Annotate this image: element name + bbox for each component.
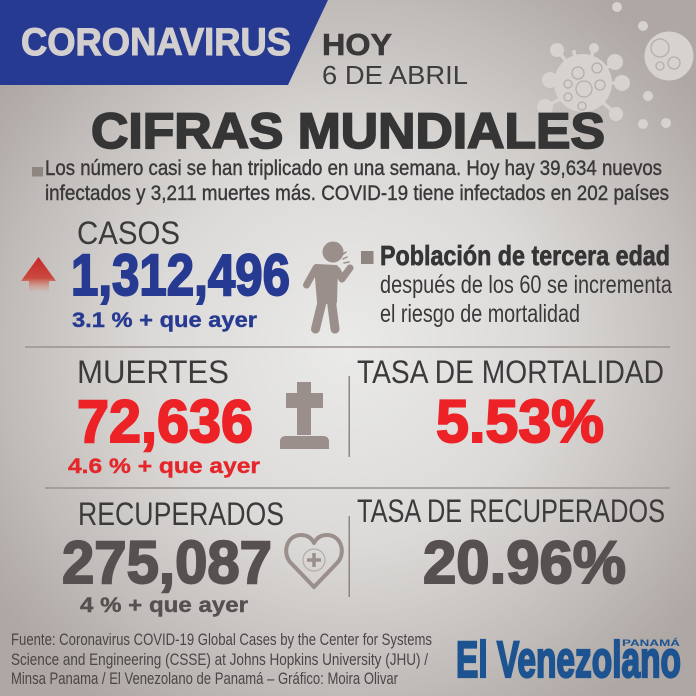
panel: tasa de mortalidad: TASA DE MORTALIDAD (357, 354, 664, 390)
panel: recuperados: 275,087 (62, 529, 272, 596)
header banner (0, 0, 328, 85)
header banner: CORONAVIRUS (21, 21, 291, 64)
title: CIFRAS MUNDIALES (91, 103, 605, 159)
panel: tasa de mortalidad (357, 354, 664, 455)
panel: casos: 1,312,496 (71, 243, 290, 308)
source text: Science and Engineering (CSSE) at Johns Hopkins University (JHU) / (11, 650, 428, 669)
panel: casos (71, 215, 290, 332)
intro text (32, 157, 669, 205)
panel: tasa de recuperados (357, 493, 665, 596)
panel: recuperados: RECUPERADOS (78, 496, 284, 532)
logo: El Venezolano: PANAMÁ (622, 638, 680, 649)
panel: poblacion de tercera edad: el riesgo de mortalidad (380, 300, 580, 328)
date heading: 6 DE ABRIL (322, 60, 468, 90)
panel: muertes: MUERTES (77, 354, 229, 390)
panel: muertes (68, 354, 260, 478)
date heading: HOY (322, 27, 392, 62)
source text: Minsa Panama / El Venezolano de Panamá – Gráfico: Moira Olivar (11, 669, 398, 688)
icon: grave cross (280, 382, 329, 449)
source text (11, 630, 432, 688)
panel: muertes: 4.6 % + que ayer (68, 455, 260, 478)
date heading (322, 27, 468, 90)
panel: tasa de recuperados: 20.96% (423, 529, 626, 596)
icon: coronavirus decoration (537, 2, 694, 129)
panel: casos: CASOS (77, 215, 180, 251)
icon: coughing person (306, 242, 350, 329)
panel: poblacion de tercera edad (361, 240, 672, 328)
source text: Fuente: Coronavirus COVID-19 Global Cases by the Center for Systems (11, 630, 432, 649)
icon: heart with plus (286, 535, 342, 587)
icon: up arrow (21, 257, 56, 291)
panel: muertes: 72,636 (77, 388, 253, 455)
panel: recuperados (62, 496, 284, 617)
panel: casos: 3.1 % + que ayer (72, 309, 257, 332)
panel: tasa de mortalidad: 5.53% (436, 388, 604, 455)
panel: recuperados: 4 % + que ayer (80, 594, 248, 617)
